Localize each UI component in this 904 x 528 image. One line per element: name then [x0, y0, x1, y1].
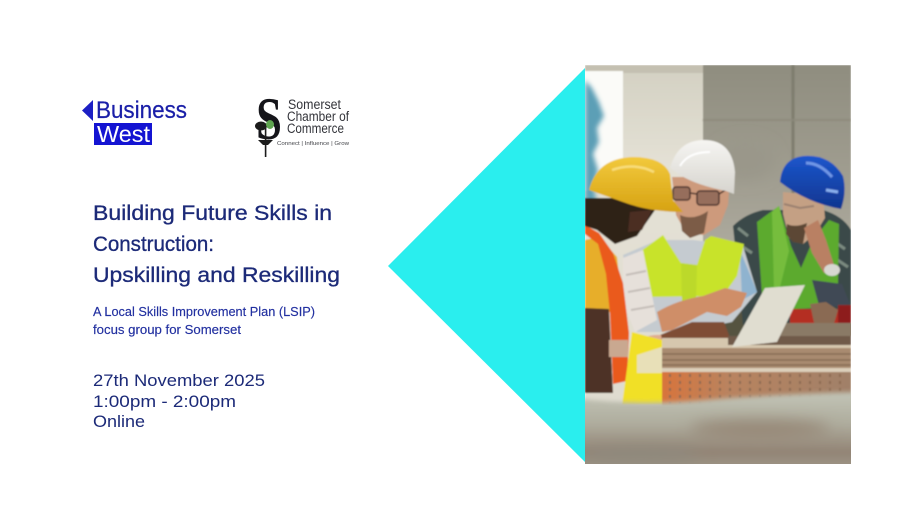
wordmark: West on blue block: West [97, 121, 151, 147]
event details: date, time, location [93, 371, 265, 431]
laptop [732, 285, 805, 347]
subtitle: focus group for Somerset [93, 323, 242, 337]
logo: Somerset Chamber of Commerce: Chamber of [287, 109, 349, 124]
hard hat: blue [780, 156, 845, 209]
wordmark: Business: Business [96, 97, 187, 124]
logo: Somerset Chamber of Commerce: Connect | Influence | Grow [277, 141, 349, 147]
worker: right, blue hard hat [733, 156, 851, 325]
worker: left, yellow hard hat [585, 157, 683, 393]
title [93, 202, 340, 287]
hand on cheek [804, 220, 834, 273]
dark area behind arms and laptop [724, 310, 745, 337]
worker: centre, white hard hat [623, 139, 758, 341]
hard hat: yellow [589, 157, 683, 212]
title: Building Future Skills in [93, 202, 332, 225]
event details: date, time, location: Online [93, 412, 145, 431]
yellow shirt [585, 238, 619, 312]
logo: Somerset Chamber of Commerce: Commerce [287, 121, 344, 136]
shirt [623, 240, 757, 332]
forearm and hand over laptop [657, 288, 747, 332]
hi-vis vest [641, 235, 744, 297]
title: Construction: [93, 233, 214, 256]
face [783, 192, 825, 244]
head [585, 198, 655, 244]
subtitle [93, 305, 315, 337]
orange vest [585, 225, 629, 384]
icon: S with sprout: S [256, 86, 282, 152]
neck and face [672, 177, 730, 235]
hard hat: white [670, 140, 735, 194]
watch [824, 264, 840, 276]
icon: left arrow [82, 100, 93, 121]
blurred foreground [585, 390, 851, 464]
event details: date, time, location: 1:00pm - 2:00pm [93, 392, 236, 411]
sleeve [623, 250, 657, 332]
photo: construction workers around a laptop [575, 65, 861, 472]
logo text: Somerset [288, 97, 341, 112]
event details: date, time, location: 27th November 2025 [93, 371, 265, 390]
subtitle: A Local Skills Improvement Plan (LSIP) [93, 305, 315, 319]
yellow vest bottom [622, 332, 663, 405]
logo: Somerset Chamber of Commerce [255, 86, 349, 157]
glasses [673, 187, 727, 205]
right background objects: red item and hand [780, 301, 851, 337]
logo: Business West [82, 97, 187, 147]
title: Upskilling and Reskilling [93, 264, 340, 287]
green vest [757, 206, 839, 310]
plaid shirt [733, 210, 851, 325]
lower arm and hand [660, 321, 730, 340]
table with corrugated stack [662, 336, 851, 406]
cyan triangle [388, 68, 585, 462]
photo background: concrete building [585, 65, 851, 404]
dark arm [585, 308, 613, 393]
